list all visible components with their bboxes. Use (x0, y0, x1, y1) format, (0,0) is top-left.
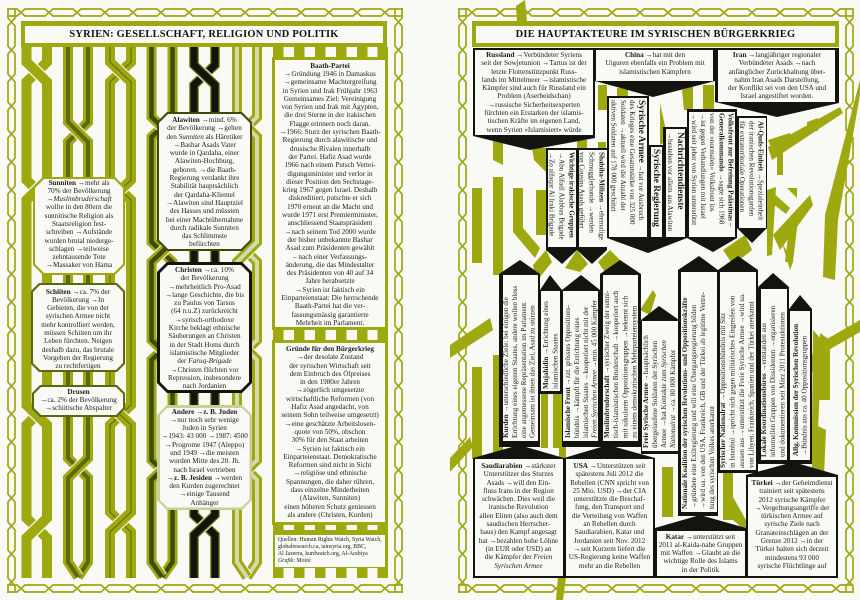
actor: Nationale Koalition: →wird ua. von den USA, Frankreich, GB und der Türkei ab legitime Vertre- (698, 292, 706, 509)
actor: Saudiarabien: fluss Irans in der Region (483, 487, 554, 495)
actor: USA: 25 Mio. USD) →der CIA (573, 487, 646, 495)
actor: Russland: →russische Sicherheitsexperten (488, 101, 580, 109)
panel: Andere: wurden Mitte des 20. Jh. (169, 457, 240, 465)
panel: Schiiten: Bevölkerung →In (52, 296, 104, 304)
actor: Iran: Israel angestiftet worden. (741, 92, 813, 100)
actor: Saudiarabien: Saudiarabien →stärkster (481, 462, 556, 470)
panel: Christen: islamistische Mitglieder (170, 349, 239, 357)
panel: Drusen: Drusen (67, 388, 90, 396)
actor: Saudiarabien: Syrischen Armee (494, 562, 543, 570)
panel: Gründe für den Bürgerkrieg: →eine geschätzte Arbeitslosen- (284, 420, 376, 428)
actor: Freie Syrische Armee: Nationalrat →ca. 80 000 Kämpfer (669, 349, 677, 448)
actor: Türkei: Türkei halten sich derzeit (755, 545, 829, 553)
actor: Syrischer Nationalrat: von Libyen, Frankreich, Spanien und der Türkei anerkannt (748, 301, 756, 468)
panel: Christen: Säuberungen an Christen (168, 332, 241, 340)
actor: Saudiarabien: Asads →will den Ein- (486, 479, 551, 487)
panel: Andere: →nur noch sehr wenige (170, 416, 239, 424)
actor: Al-Quds-Einheit: für extraterritoriale Operationen (738, 121, 746, 212)
panel: Baath-Partei: →gemeinsame Machtergreifung (283, 78, 377, 86)
panel: Alawiten: Alawiten-Hochburg, (175, 157, 234, 165)
panel: Baath-Partei: 1966 nach einem Putsch Vertei- (284, 161, 376, 169)
actor: Türkei: türkischen Armee auf (761, 512, 823, 520)
actor: China: Uiguren ebenfalls ein Problem mit (605, 59, 705, 67)
actor: Shabiha-Milizen: Schmugglerbande →werden (588, 152, 596, 233)
actor: USA: spätestens Juli 2012 die (575, 470, 644, 478)
actor: Muslimbruderschaft: tisch-islamistischen Bruderschaft →kooperiert auch (612, 290, 620, 438)
actor: Volksfront zur Befreiung Palästinas: Volksfront zur Befreiung Palästinas – (727, 113, 735, 226)
panel: Baath-Partei: Einparteienstaat: Die herrschende (282, 294, 378, 302)
panel: Christen: →mehrheitlich Pro-Asad (168, 283, 241, 291)
panel: Sunniten: →Massaker von Hama (46, 261, 112, 269)
actor: Saudiarabien: iranische Revolution (489, 503, 548, 511)
panel: Drusen: →schiitische Abspalter (45, 404, 112, 412)
panel: Baath-Partei: Jahre herabsetzte (305, 277, 355, 285)
panel: Gründe für den Bürgerkrieg: einen höheren Schutz geniessen (284, 503, 376, 511)
Syrische Armee: des Krieges eine Gesamtstärke von 325 000 (628, 100, 636, 225)
panel: Sunniten: schlagen →teilweise (49, 245, 109, 253)
actor: Muslimbruderschaft: mit säkularen Oppositionsgruppen →bekennt sich (621, 296, 629, 438)
panel: Andere: den Kurden zugerechnet (169, 482, 240, 490)
panel: Alawiten: des Hasses und müssten (170, 207, 239, 215)
actor: Katar: Katar →unterstützt seit (666, 532, 735, 540)
panel: Schiiten (31, 283, 125, 372)
actor: Saudiarabien: schwächen. Dies weil die (482, 495, 555, 503)
actor: Syrischer Nationalrat: in Istanbul →spricht sich gegen militärisches Eingreifen von (729, 296, 737, 468)
panel: Alawiten: Regierung verdankt ihre (170, 174, 239, 182)
panel: Baath-Partei: Baath-Partei (310, 62, 350, 70)
panel: Gründe für den Bürgerkrieg: Gründe für den Bürgerkrieg (286, 345, 374, 353)
actor: Türkei: syrische Ziele nach (764, 520, 820, 528)
panel: Gründe für den Bürgerkrieg: Spannungen, die daher rühren, (286, 478, 374, 486)
actor: Russland: lands im Mittelmeer →islamistische (482, 76, 586, 84)
actor: Volksfront zur Befreiung Palästinas: Generalkommando →sagte sich 1968 (717, 113, 725, 224)
actor: Katar: 2011 al-Kaida-nahe Gruppen (659, 541, 742, 549)
panel: Sunniten: wollte in den 80ern die (46, 203, 112, 211)
panel: Baath-Partei: Gemeinsames Ziel: Vereinigung (284, 95, 376, 103)
panel: Sunniten: zehntausende Tote (52, 253, 106, 261)
panel: Andere: nach Israel vertrieben (173, 466, 236, 474)
actor: Volksfront zur Befreiung Palästinas: →wird seit jeher von Syrien unterstützt (690, 113, 698, 225)
actor: Kurden (499, 260, 540, 447)
actor: Saudiarabien: hat →bezahlen hohe Löhne (479, 537, 558, 545)
actor: USA: USA →Unterstützen seit (574, 462, 645, 470)
panel: Gründe für den Bürgerkrieg: (Alawiten, Sunniten) (300, 494, 360, 502)
actor: Mujahidin: islamischen Staates (551, 334, 559, 389)
panel: Baath-Partei: Mehrheit im Parlament. (296, 319, 364, 327)
panel: Baath-Partei: →Syrien ist faktisch ein (295, 286, 365, 294)
panel: Gründe für den Bürgerkrieg: seinem Sohn teilweise umgesetzt) (281, 411, 379, 419)
actor: USA (564, 445, 655, 578)
panel: Andere: →z. B. Jesiden →werden (167, 474, 242, 482)
actor: Kurden: Gemeinsam ist ihnen das Ziel, Asad zu stürzen (529, 305, 537, 438)
Syrische Armee (609, 98, 647, 237)
panel: Baath-Partei: →Gründung 1946 in Damaskus (284, 70, 376, 78)
sources note: Quellen: Human Rights Watch, Syria Watch, (278, 537, 382, 543)
title: left page (21, 21, 387, 47)
actor: USA: unterstützte die Beschaf- (574, 495, 645, 503)
actor: Nationale Koalition (678, 256, 718, 516)
panel: Drusen (32, 385, 125, 417)
Nachrichtendienste (666, 129, 685, 237)
panel: Sunniten: wurden brutal niederge- (45, 237, 113, 245)
actor: Iran: nahm Iran Asads Darstellung, (734, 76, 820, 84)
actor: Katar: in der Politik (682, 566, 719, 574)
actor: Islamische Front: Islamische Front →zzt. grösstes Oppositions- (564, 305, 572, 438)
sources note: Al Jazeera, kurdwatch.org, Al-Arabiya (278, 551, 368, 557)
sources note: Grafik: Moiré (278, 558, 311, 564)
actor: Saudiarabien: saudischen Herrscher- (487, 520, 550, 528)
panel: Baath-Partei: von Syrien und Irak mit Ägypten, (281, 103, 379, 111)
actor: Russland: Russland →Verbündeter Syriens (486, 51, 582, 59)
panel: Gründe für den Bürgerkrieg: Hafiz Asad angedacht, von (291, 403, 369, 411)
actor: Muslimbruderschaft: zu einem demokratischen Mehrparteiensystem (630, 306, 638, 438)
actor: Mujahidin: Mujahidin →Errichtung eines (542, 301, 550, 389)
actor: Türkei: Türkei →der Geheimdienst (751, 479, 833, 487)
actor: Wichtige irakische Gruppen: →Abu Alfadl Alabbas Brigade (558, 152, 566, 240)
panel: Andere: →1943: 43 000 →1987: 4500 (161, 432, 248, 440)
panel: Gründe für den Bürgerkrieg: Reformen sind nicht in Sicht (289, 461, 371, 469)
actor: Russland: fürchten ein Erstarken der islamis- (484, 109, 584, 117)
panel: Sunniten: 70% der Bevölkerung (47, 187, 111, 195)
actor: Islamische Front (562, 275, 600, 447)
panel: Gründe für den Bürgerkrieg: der syrischen Wirtschaft seit (289, 362, 371, 370)
actor: Syrische Regierung group (607, 96, 687, 253)
actor: USA: Saudiarabien, Katar und (575, 528, 644, 536)
actor: Volksfront zur Befreiung Palästinas (687, 109, 737, 252)
actor: Al-Quds-Einheit (737, 116, 767, 243)
panel: Baath-Partei: krieg 1967 gegen Israel. Deshalb (283, 186, 377, 194)
panel: Baath-Partei: drusische Rivalen innerhalb (290, 145, 370, 153)
panel: Gründe für den Bürgerkrieg (272, 340, 388, 525)
actor: Lokale Koordinationsbüros: informellen Gruppen von Dissidenten →organisieren (770, 306, 778, 457)
Nachrichtendienste: Nachrichtendienste (675, 132, 685, 210)
panel: Baath-Partei: 1970 erneut an die Macht und (287, 203, 373, 211)
panel: Alawiten: das Schlimmste (182, 232, 227, 240)
title: right page (472, 21, 839, 47)
actor: Syrischer Nationalrat (718, 256, 758, 473)
title: right page: DIE HAUPTAKTEURE IM SYRISCHEN BÜRGERKRIEG (516, 29, 795, 40)
panel: Christen: der Faruq-Brigade (177, 357, 232, 365)
actor: Russland: wenn Syrien «Islamisiert» würde (486, 126, 582, 134)
panel: Baath-Partei: der bisher unbekannte Bashar (287, 236, 373, 244)
Syrische Regierung: Syrische Regierung (651, 149, 661, 227)
actor: Iran (715, 48, 839, 117)
panel: Sunniten: Sunniten →mehr als (48, 178, 110, 186)
panel: Alawiten: Alawiten →mind. 6% (172, 116, 237, 124)
panel: Alawiten: →Alawiten sind Hauptziel (166, 199, 243, 207)
panel: Andere: →einige Tausend (179, 490, 230, 498)
actor: Saudiarabien (473, 445, 564, 578)
panel: Christen: Repression, insbesondere (168, 374, 241, 382)
panel: Alawiten: →Bashar Asads Vater (173, 141, 236, 149)
panel: Schiiten: müssen Schiiten um ihr (44, 329, 112, 337)
braid group 3 (273, 47, 388, 578)
actor: Nationale Koalition: tung des syrischen Volkes anerkannt (708, 406, 716, 509)
actor: Allg. Kommission: Allg. Kommission der Syrischen Revolution (792, 324, 800, 456)
actor: Saudiarabien: (in EUR oder USD) an (486, 545, 551, 553)
actor: USA: Rebellen (CNN spricht von (570, 479, 649, 487)
panel: Schiiten: zu rechtfertigen (55, 362, 101, 370)
actor: Türkei: syrische Flüchtlinge auf (757, 562, 827, 570)
actor: Volksfront zur Befreiung Palästinas: von der »normalen« Volksfront los (708, 113, 716, 212)
actor: Saudiarabien: Unterstützer des Sturzes (484, 470, 553, 478)
panel: Christen: →lange Geschichte, die bis (165, 291, 244, 299)
actor: Mujahidin (540, 275, 562, 394)
panel: Baath-Partei: Flagge erinnern noch daran. (290, 120, 370, 128)
actor: Freie Syrische Armee: Freie Syrische Armee →hauptsächlich (642, 335, 650, 448)
actor: Kurden: eine angemessene Repräsentation im Parlament. (520, 301, 528, 438)
actor: USA: →seit Kurzem liefert die (574, 545, 645, 553)
panel: Sunniten: Staatsreligion fest- (52, 220, 106, 228)
panel: Baath-Partei (272, 57, 388, 330)
panel: Baath-Partei: fassungsmässig garantierte (291, 311, 369, 319)
actor: Al-Quds-Einheit: Al-Quds-Einheit →Spezialeinheit (757, 121, 765, 220)
actor: Syrischer Nationalrat: Syrischer Nationalrat →Oppositionsbündnis mit Sitz (719, 313, 727, 468)
actor: Muslimbruderschaft (600, 260, 641, 447)
actor: Wichtige irakische Gruppen (546, 148, 577, 264)
actor: USA: fung, den Transport und (575, 503, 644, 511)
panel: Baath-Partei: der Partei. Hafiz Asad wurde (288, 153, 372, 161)
actor: Iran: Iran →langjähriger regionaler (733, 51, 821, 59)
panel: Andere: und 1949 →die meisten (170, 449, 239, 457)
panel: Sunniten: sunnitische Religion als (45, 212, 113, 220)
actor: USA: die Verteilung von Waffen (572, 512, 647, 520)
actor: Türkei: 2012 syrische Kämpfer (758, 496, 826, 504)
panel: Christen: zu Paulus von Tarsus (174, 299, 235, 307)
actor: Iran: der Konflikt sei von den USA und (728, 84, 826, 92)
actor: Islamische Front: islamischen Staates →kooperiert nicht mit der (582, 307, 590, 438)
panel: Gründe für den Bürgerkrieg: 30% für den Staat arbeiten (292, 436, 368, 444)
panel: Alawiten: der Qardaha-Klientel (174, 191, 235, 199)
actor: Nationale Koalition: →gründete eine Exilregierung und will eine Übergangsregierung bilden (690, 305, 698, 509)
panel: Christen (157, 262, 252, 393)
panel: Schiiten: Gebieten, die von der (47, 304, 109, 312)
panel: Alawiten: der Bevölkerung →gelten (167, 124, 242, 132)
panel: Alawiten: den Sunniten als Häretiker (166, 133, 243, 141)
panel: Baath-Partei: Baath-Partei hat die ver- (295, 302, 365, 310)
panel: Christen: Christen →ca. 10% (175, 266, 234, 274)
panel: Andere: Juden in Syrien (182, 424, 227, 432)
panel: Baath-Partei: die drei Sterne in der irakischen (284, 111, 376, 119)
panel: Schiiten: Leben fürchten. Neigen (44, 337, 112, 345)
panel: Christen: nach Jordanien (183, 382, 226, 390)
panel: Baath-Partei: Regierung durch alawitische und (283, 136, 377, 144)
actor: Saudiarabien: allen Eliten (also auch dem (479, 512, 558, 520)
actor: Türkei: mindestens 93 000 (765, 554, 819, 562)
panel: Alawiten: wurde in Qardaha, einer (170, 149, 239, 157)
actor: Freie Syrische Armee: übergelaufene Soldaten der Syrischen (651, 340, 659, 448)
panel: Gründe für den Bürgerkrieg: in den 1980er Jahren (300, 378, 360, 386)
panel: Baath-Partei: →nach seinem Tod 2000 wurde (284, 228, 376, 236)
panel: Baath-Partei: Asad zum Präsidenten gewählt (286, 244, 374, 252)
actor: China: islamistischen Kämpfern (619, 68, 691, 76)
actor: Volksfront zur Befreiung Palästinas: →ist gegen Verhandlungen mit Israel (699, 113, 707, 219)
panel: Andere: →Progrome 1947 (Aleppo) (165, 441, 244, 449)
actor: Muslimbruderschaft: Muslimbruderschaft →syrischer Zweig der sunni- (603, 291, 611, 438)
actor: Türkei: trainiert seit spätestens (759, 487, 825, 495)
actor: China (595, 48, 715, 97)
actor: Katar (655, 515, 746, 578)
actor: Kurden: Errichtung eines eigenen Staates, andere wollen bloss (511, 286, 519, 438)
actor: USA: US-Regierung keine Waffen (569, 553, 650, 561)
panel: Gründe für den Bürgerkrieg: dass einzelne Minderheiten (291, 486, 369, 494)
actor: China: China →hat mit den (625, 51, 685, 59)
Nachrichtendienste: →bestehen vor allem aus Alawiten (666, 132, 674, 231)
Syrische Armee: aktiven Soldaten auf 178 000 geschätzt (610, 100, 618, 211)
panel: Christen: in der Stadt Homs durch (169, 341, 240, 349)
actor: Shabiha-Milizen (577, 148, 607, 264)
panel: Schiiten: Schiiten →ca. 7% der (46, 288, 110, 296)
panel: Gründe für den Bürgerkrieg: →Syrien ist faktisch ein (295, 445, 365, 453)
panel: Baath-Partei: diskreditiert, putschte er sich (288, 194, 372, 202)
panel: Baath-Partei: anschliessend Staatspräsident (288, 219, 372, 227)
panel: Andere: Andere →z. B. Juden (172, 408, 237, 416)
actor: Islamische Front: bündnis →kämpft für die Errichtung eines (573, 318, 581, 438)
actor: Wichtige irakische Gruppen: Wichtige irakische Gruppen (568, 152, 576, 238)
panel: Schiiten: Vorgehen der Regierung (43, 354, 113, 362)
actor: Al-Quds-Einheit: der iranischen Revolutionsgarden (747, 121, 755, 216)
actor: Lokale Koordinationsbüros: und dokumentieren seit März 2011 Protestaktionen (779, 312, 787, 457)
panel: Christen: →Christen flüchten vor (170, 366, 239, 374)
panel: Sunniten (33, 177, 125, 275)
panel: Andere: Anhänger (190, 499, 219, 507)
actor: Russland (473, 48, 595, 150)
actor: Türkei: Granateinschlägen an der (755, 529, 829, 537)
panel: Baath-Partei: des Präsidenten von 40 auf 34 (287, 269, 373, 277)
actor: Wichtige irakische Gruppen: →Zo alfaqar Al Iraki Brigade (548, 152, 556, 236)
braid group 1 (26, 47, 131, 578)
actor: Katar: mit Waffen →Glaubt an die (661, 549, 740, 557)
panel: Alawiten (157, 112, 252, 251)
panel: Drusen: →ca. 2% der Bevölkerung (40, 396, 117, 404)
panel: Gründe für den Bürgerkrieg: wirtschaftliche Reformen (von (286, 395, 374, 403)
panel: Baath-Partei: digungsminister und verlor in (287, 170, 373, 178)
panel: Gründe für den Bürgerkrieg: dem Einbruch des Ölpreises (290, 370, 370, 378)
panel: Alawiten: geboren. →die Baath- (173, 166, 236, 174)
actor: Lokale Koordinationsbüros: Lokale Koordinationsbüros →entstanden aus (760, 323, 768, 457)
panel: Christen: Kirche beklagt ethnische (169, 324, 240, 332)
panel: Baath-Partei: wurde 1971 erst Premierminister, (282, 211, 378, 219)
sources note (275, 535, 385, 567)
actor: Iran: Verbündeter Asads →nach (739, 59, 815, 67)
panel: Christen: →syrisch-orthodoxe (175, 316, 234, 324)
Syrische Armee: Soldaten →aktuell wird die Anzahl der (619, 100, 627, 211)
panel: Gründe für den Bürgerkrieg: →der desolate Zustand (297, 353, 363, 361)
actor: Katar: wichtige Rolle des Islams (663, 557, 738, 565)
actor: Russland: tischen Kräfte im eigenen Land, (488, 117, 580, 125)
panel: Alawiten: Stabilität hauptsächlich (171, 182, 238, 190)
Syrische Armee: Syrische Armee →hat vor Ausbruch (636, 100, 646, 220)
actor: USA: mehr an die Rebellen (579, 562, 640, 570)
panel: Gründe für den Bürgerkrieg: als andere (Christen, Kurden) (287, 511, 373, 519)
actor: Lokale Koordinationsbüros (758, 273, 789, 464)
actor: Russland: Kämpfer sind auch für Russland ein (482, 84, 586, 92)
panel: Schiiten: syrischen Armee nicht (46, 312, 110, 320)
panel: Gründe für den Bürgerkrieg: →zögerlich umgesetzte (296, 386, 364, 394)
panel: Baath-Partei: dieser Position den Sechstage- (286, 178, 374, 186)
panel: Gründe für den Bürgerkrieg: quote von 50%, obschon (294, 428, 366, 436)
panel: Andere (157, 405, 252, 510)
panel: Alawiten: durch radikale Sunniten (170, 224, 239, 232)
actor: Russland: Problem (Aserbeidschan) (497, 92, 571, 100)
actor: Freie Syrische Armee: Armee →hat Kontakte zum Syrischen (660, 340, 668, 448)
panel: Christen: (64 n.u.Z) zurückreicht (171, 307, 238, 315)
actor: Allg. Kommission: →Bündnis aus ca. 40 Oppositionsgruppen (801, 336, 809, 456)
sources note: globalresearch.ca, iamsyria.org, BBC, (278, 544, 366, 550)
actor: Türkei: Grenze 2012 →in der (761, 537, 823, 545)
panel: Sunniten: →Muslimbruderschaft (46, 195, 112, 203)
actor: Saudiarabien: die Kämpfer der Freien (485, 553, 552, 561)
actor: Saudiarabien: haus) den Kampf angesagt (480, 528, 557, 536)
panel: Christen: der Bevölkerung (180, 274, 229, 282)
actor: Nationale Koalition: Nationale Koalition der syrischen Revolutions- und Oppositionskräfte (680, 297, 688, 509)
panel: Alawiten: befürchten (189, 240, 220, 248)
actor: Türkei: →Vergeltungsangriffe der (754, 504, 829, 512)
braid group 2 (152, 47, 257, 578)
panel: Baath-Partei: →1966: Sturz der syrischen Baath- (279, 128, 381, 136)
actor: USA: an Rebellen durch (583, 520, 636, 528)
actor: Shabiha-Milizen: Shabiha-Milizen →ehemalige (598, 152, 606, 240)
panel: Baath-Partei: in Syrien und Irak Frühjahr 1963 (283, 87, 377, 95)
actor: Freie Syrische Armee (641, 306, 679, 454)
panel: Sunniten: schreiben →Aufstände (46, 228, 112, 236)
panel: Baath-Partei: – nach einer Verfassungs- (293, 253, 367, 261)
panel: Schiiten: deshalb dazu, das brutale (42, 346, 114, 354)
actor: Russland: seit der Sowjetunion →Tartus ist der (481, 59, 587, 67)
actor: USA: Jordanien seit Nov. 2012 (574, 537, 645, 545)
panel: Gründe für den Bürgerkrieg: Einparteienstaat. Demokratische (283, 453, 377, 461)
actor: Iran: anfänglicher Zurückhaltung über- (729, 68, 825, 76)
actor: Russland: letzte Flottenstützpunkt Russ- (491, 68, 577, 76)
panel: Alawiten: bei einer Machtübernahme (166, 216, 243, 224)
panel: Gründe für den Bürgerkrieg: →religiöse und ethnische (293, 469, 367, 477)
panel: Schiiten: mehr kontrolliert werden, (41, 321, 115, 329)
actor: Allg. Kommission (789, 295, 812, 464)
actor: Kurden: Kurden →unterschiedliche Ziele: bei einigen die (502, 297, 510, 438)
actor: Syrischer Nationalrat: aussen aus →unterstützt die Freie Syrische Armee →wird ua. (738, 293, 746, 468)
title: left page: SYRIEN: GESELLSCHAFT, RELIGION UND POLITIK (69, 29, 339, 40)
actor: Türkei (746, 462, 838, 578)
green shards of the right page (450, 0, 860, 600)
actor: Islamische Front: Freien Syrischen Armee →min. 45 000 Kämpfer (591, 300, 599, 438)
actor: Shabiha-Milizen: von Cousins Asads geführt (578, 152, 586, 228)
panel: Baath-Partei: änderung, die das Mindestalter (286, 261, 374, 269)
